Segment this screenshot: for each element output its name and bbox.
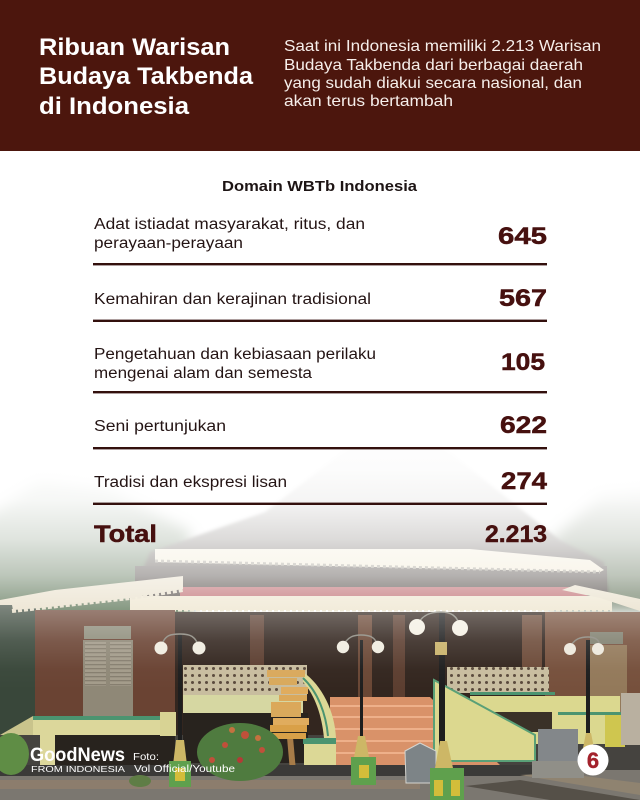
lamp posts [154,612,604,800]
foundation and beams [0,692,640,770]
lower eave [130,596,612,610]
walls [35,610,640,765]
intro text: Budaya Takbenda dari berbagai daerah [284,57,583,74]
photo credit [133,752,236,775]
right door [590,632,627,712]
photo credit: Foto: [133,752,159,763]
intro text [284,38,601,110]
row: total: Total [94,521,157,548]
stone plaque [405,743,436,783]
row: pengetahuan: 105 [501,349,545,376]
row: pengetahuan: mengenai alam dan semesta [94,365,312,382]
logo: GoodNews from Indonesia: FROM INDONESIA [31,764,125,774]
page number badge [578,744,608,776]
row: seni: 622 [500,412,547,439]
row: seni [93,412,547,449]
table: domain counts [93,216,547,548]
logo: GoodNews from Indonesia: GoodNews [30,745,125,766]
title [39,34,253,120]
row: tradisi: 274 [501,468,547,495]
row: adat istiadat [93,216,547,265]
trees behind the house [0,480,640,740]
title: di Indonesia [39,93,189,120]
row: tradisi [93,468,547,505]
intro text: Saat ini Indonesia memiliki 2.213 Warisan [284,38,601,55]
header band [0,0,640,151]
white fade over the photo [0,430,640,690]
intro text: yang sudah diakui secara nasional, dan [284,75,582,92]
left wing eave [0,576,183,611]
left stair rail [303,672,336,770]
table heading: Domain WBTb Indonesia [222,178,418,195]
left door [83,626,133,718]
row: kemahiran [93,285,547,322]
garden bushes [0,723,283,787]
stone monument [532,729,584,778]
right stair rail [434,680,535,761]
row: pengetahuan: Pengetahuan dan kebiasaan perilaku [94,346,376,363]
wooden signpost [267,670,309,786]
row: kemahiran: Kemahiran dan kerajinan tradisional [94,291,371,308]
lattice railings [183,665,549,695]
row: adat istiadat: perayaan-perayaan [94,235,243,252]
row: seni: Seni pertunjukan [94,418,226,435]
row: total: 2.213 [485,521,547,548]
right wing eave [562,585,640,611]
page number badge: 6 [587,748,599,773]
photo credit: Vol Official/Youtube [134,764,236,775]
title: Ribuan Warisan [39,34,230,61]
row: adat istiadat: Adat istiadat masyarakat, ritus, dan [94,216,365,233]
row: total [94,521,547,548]
title: Budaya Takbenda [39,63,253,90]
signboard [621,693,640,745]
row: kemahiran: 567 [499,285,547,312]
row: pengetahuan [93,346,547,393]
red roof strip [180,587,590,597]
staircase [330,697,500,765]
lower storey shadow [135,566,607,600]
upper eave [155,549,604,572]
background photo: traditional wooden house [0,440,640,800]
ground [0,765,640,800]
upper roof [130,445,610,600]
row: adat istiadat: 645 [498,223,547,250]
row: tradisi: Tradisi dan ekspresi lisan [94,474,287,491]
intro text: akan terus bertambah [284,93,453,110]
